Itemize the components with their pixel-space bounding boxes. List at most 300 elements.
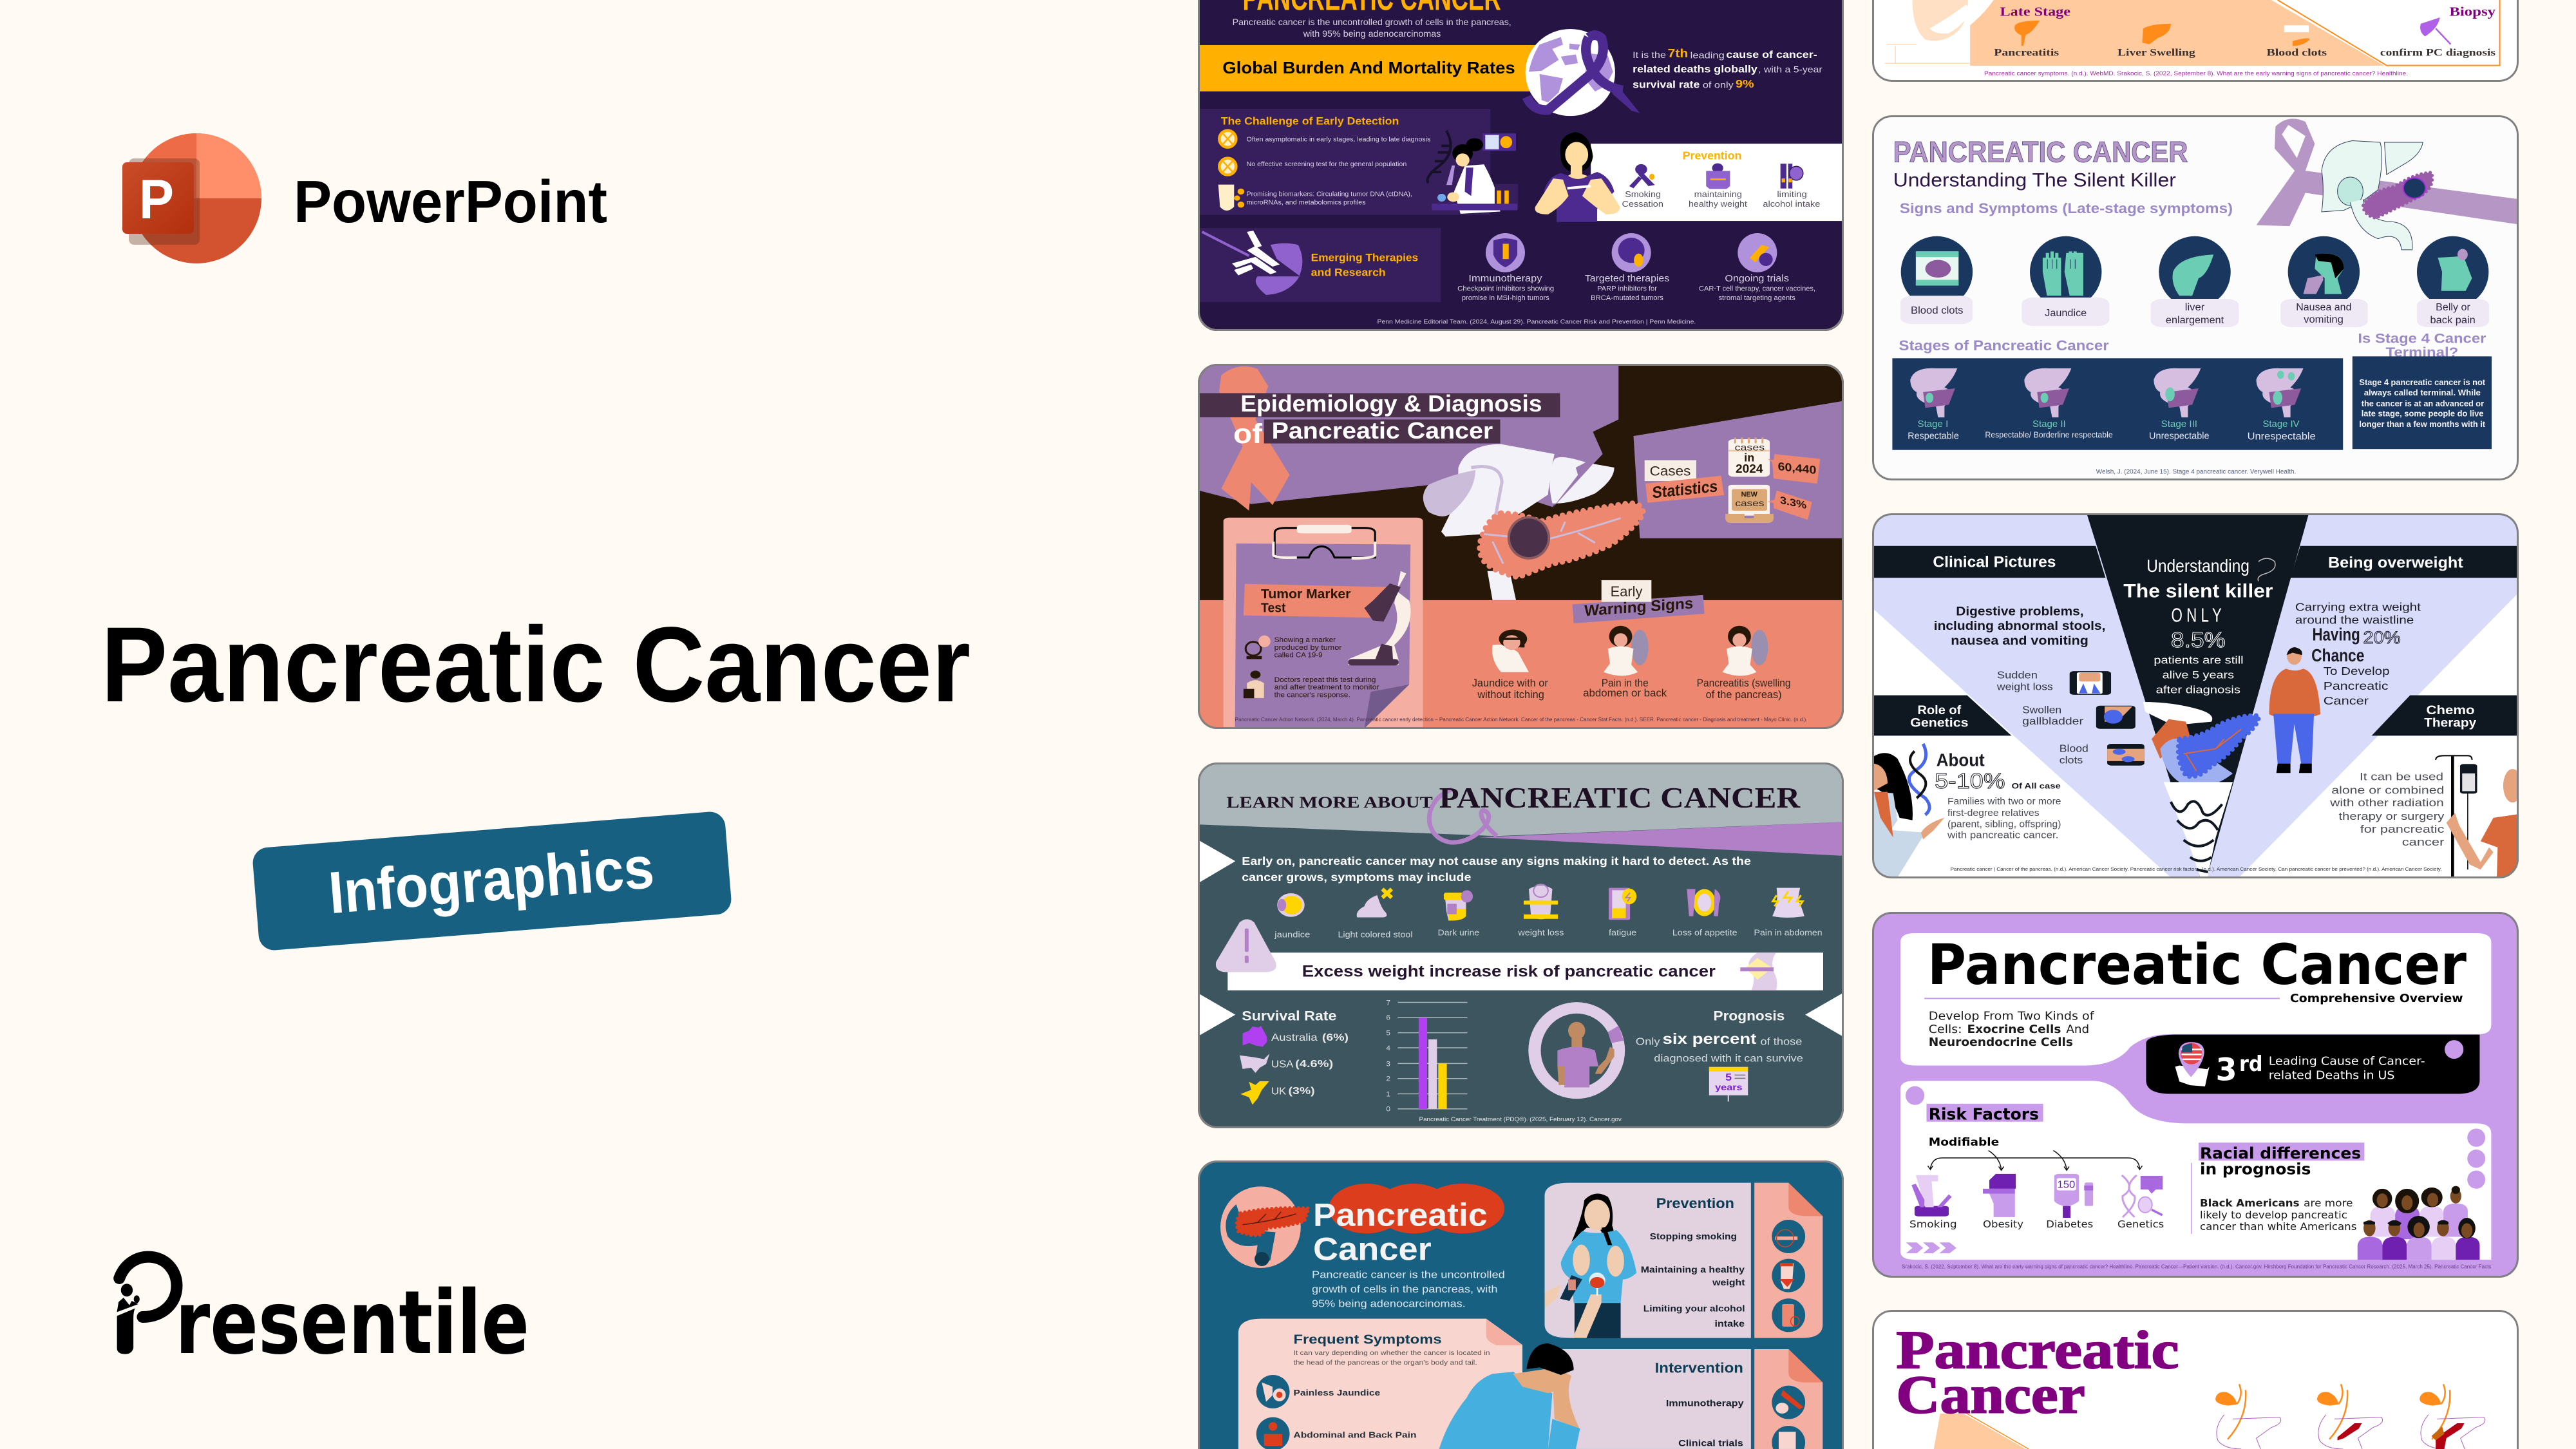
text block: late stage labels: Late Stage <box>2000 5 2070 19</box>
block: survival rate: (4.6%) <box>1295 1057 1333 1070</box>
block: cases statistics: Cases <box>1650 464 1690 479</box>
illustration: doctor with DNA <box>1874 744 1944 877</box>
text block: overweight chance <box>2295 601 2421 707</box>
block: risk factors: Obesity <box>1983 1219 2023 1230</box>
panel: frequent symptoms card: the head of the pancreas or the organ's body and tail. <box>1293 1359 1477 1367</box>
panel: frequent symptoms card: Abdominal and Back Pain <box>1293 1430 1417 1440</box>
heading: early warning signs: Early <box>1611 583 1643 600</box>
text block: definition: Pancreatic cancer is the uncontrolled growth of cells in the pancreas, <box>1233 18 1511 27</box>
panel: prevention: Cessation <box>1622 200 1663 209</box>
panel: intervention card: Clinical trials <box>1678 1438 1743 1448</box>
block: cases statistics: 60,440 <box>1778 460 1816 477</box>
panel: prevention: Prevention <box>1683 149 1741 162</box>
text block: late stage labels: Liver Swelling <box>2117 47 2195 59</box>
callout: 3rd leading cause: Leading Cause of Cancer- <box>2269 1054 2425 1068</box>
text block: genetics: About <box>1937 750 1985 770</box>
text block: center statistic: after diagnosis <box>2156 684 2240 696</box>
block: cases statistics: 2024 <box>1736 462 1763 475</box>
block: clinical signs with icons: Swollen <box>2022 704 2061 715</box>
panel: prevention: Smoking <box>1625 190 1661 199</box>
heading: signs and symptoms: Signs and Symptoms (Late-stage symptoms) <box>1900 200 2233 216</box>
panel: stages strip: Respectable <box>1908 430 1959 441</box>
text block: therapy labels: PARP inhibitors for <box>1597 285 1657 292</box>
panel: clipboard tumor marker test: Doctors repeat this test during <box>1274 676 1376 684</box>
text block: center statistic: Understanding <box>2146 556 2249 576</box>
block: cases statistics: NEW <box>1741 491 1757 498</box>
illustration: pancreas stage 3 <box>2420 1384 2485 1449</box>
block: prognosis: six percent <box>1663 1030 1757 1047</box>
panel: frequent symptoms card: It can vary depending on whether the cancer is located in <box>1293 1350 1490 1357</box>
illustration: abdominal pain patient <box>1604 626 1649 676</box>
banner: global burden: Global Burden And Mortality Rates <box>1222 58 1515 77</box>
callout: 3rd leading cause: related Deaths in US <box>2269 1068 2394 1082</box>
text block: 7th leading cause: leading <box>1690 51 1725 61</box>
source: Pancreatic Cancer Action Network. (2024, March 4). Pancreatic cancer early detection – Pancreatic Cancer Action Network. Cancer of the pancreas - Cancer Stat Facts. (n.d.). SEER. Pancreatic cancer - Diagnosis and treatment - Mayo Clinic. (n.d.). <box>1235 716 1807 723</box>
text block: chemo therapy: for pancreatic <box>2360 823 2444 835</box>
panel: stages strip: Stage I <box>1918 418 1948 429</box>
panel: intervention card <box>1544 1349 1823 1449</box>
text block: therapy labels <box>1457 273 1815 302</box>
panel: prevention card: intake <box>1714 1318 1745 1329</box>
panel: challenge of early detection: microRNAs, and metabolomics profiles <box>1247 199 1366 206</box>
logo: Presentile <box>117 1257 529 1374</box>
icon: ongoing trials <box>1738 233 1777 272</box>
text block: cell kinds: Exocrine Cells <box>1967 1023 2061 1036</box>
text block: therapy labels: Targeted therapies <box>1585 273 1669 283</box>
block: prognosis: of those <box>1760 1036 1802 1047</box>
heading: early warning signs <box>1573 580 1705 623</box>
badge: Infographics: Infographics <box>327 835 656 926</box>
text block: therapy labels: CAR-T cell therapy, cancer vaccines, <box>1699 285 1815 292</box>
text block: description: growth of cells in the pancreas, with <box>1312 1283 1498 1295</box>
text block: symptom labels: jaundice <box>1274 929 1310 939</box>
illustration: scientist at microscope <box>1427 131 1518 214</box>
text block: center statistic: O N L Y <box>2172 605 2222 627</box>
text block: overweight chance: Chance <box>2311 646 2364 665</box>
panel: emerging therapies <box>1198 228 1441 302</box>
icon: globe with ribbon <box>1526 29 1640 116</box>
title: of <box>1233 418 1263 449</box>
panel: stages strip <box>1892 358 2343 450</box>
panel: emerging therapies: Emerging Therapies <box>1311 251 1418 263</box>
text block: warning sign labels: abdomen or back <box>1583 687 1667 699</box>
text block: symptom labels: fatigue <box>1609 927 1636 937</box>
heading: is stage 4 terminal: Is Stage 4 Cancer <box>2358 331 2486 346</box>
panel: stage 4 explanation <box>2353 356 2492 449</box>
title: Understanding The Silent Killer <box>1893 170 2176 191</box>
text block: definition: with 95% being adenocarcinomas <box>1303 30 1441 39</box>
text block: warning sign labels: Jaundice with or <box>1472 677 1548 689</box>
source: Pancreatic Cancer Treatment (PDQ®). (2025, February 12). Cancer.gov. <box>1419 1116 1623 1122</box>
text block: genetics: (parent, sibling, offspring) <box>1947 819 2061 829</box>
text block: late stage labels <box>1994 5 2496 59</box>
text block: genetics <box>1935 750 2061 840</box>
title: Pancreatic <box>1896 1320 2179 1379</box>
block: clinical signs with icons: weight loss <box>1996 681 2053 692</box>
panel: comprehensive overview lilac <box>1872 912 2519 1278</box>
text block: warning sign labels: Pain in the <box>1602 677 1649 689</box>
panel: challenge of early detection: Often asymptomatic in early stages, leading to late diagnosis <box>1247 136 1430 143</box>
block: clinical signs with icons: Sudden <box>1997 669 2038 681</box>
icon: warning triangle <box>1216 919 1276 972</box>
text block: intro <box>1242 855 1751 884</box>
icon: ribbon <box>1219 366 1290 511</box>
heading cloud <box>1329 1184 1504 1233</box>
illustration: chemo patient with IV <box>2436 755 2522 878</box>
illustration: patient holding abdomen <box>1874 0 1994 66</box>
block: cases statistics: cases <box>1735 443 1765 453</box>
text block: center statistic: patients are still <box>2154 654 2244 667</box>
text block: intro: Early on, pancreatic cancer may not cause any signs making it hard to detect. As the <box>1242 855 1751 867</box>
title <box>1313 1197 1488 1267</box>
block: survival rate: (3%) <box>1289 1084 1315 1096</box>
title: Pancreatic Cancer <box>1272 417 1493 444</box>
panel: intervention card: Immunotherapy <box>1666 1398 1744 1408</box>
text block: therapy labels: promise in MSI-high tumors <box>1462 294 1549 302</box>
block: risk factors: Smoking <box>1909 1219 1957 1230</box>
panel: stages strip: Unrespectable <box>2149 430 2210 441</box>
block: cases statistics: cases <box>1735 498 1765 509</box>
panel: frequent symptoms card: Frequent Symptoms <box>1293 1332 1442 1347</box>
block: clinical signs with icons: clots <box>2060 754 2083 766</box>
panel: prevention: alcohol intake <box>1763 200 1820 209</box>
text block: symptom pills: Belly or <box>2436 301 2470 313</box>
text block: overweight chance: Pancreatic <box>2324 679 2389 692</box>
panel: clipboard tumor marker test: called CA 19-9 <box>1274 651 1323 659</box>
text block: intro: cancer grows, symptoms may include <box>1242 871 1471 884</box>
block: survival rate: Australia <box>1271 1031 1318 1043</box>
panel: prevention card <box>1544 1183 1823 1338</box>
panel: prevention: maintaining <box>1694 190 1742 199</box>
panel: stages strip: Stage II <box>2032 418 2066 429</box>
text block: genetics: 5-10% <box>1935 769 2005 793</box>
banner: global burden <box>1198 45 1536 91</box>
illustration: liver and pancreas with tumor <box>1423 444 1643 600</box>
text block: 7th leading cause: cause of cancer- <box>1726 49 1817 61</box>
panel: prevention card: Limiting your alcohol <box>1643 1303 1745 1314</box>
bar chart: survival rate: 3 <box>1386 1059 1390 1068</box>
text block: description: 95% being adenocarcinomas. <box>1312 1298 1466 1309</box>
panel: global burden (dark purple) <box>1198 0 1844 331</box>
panel: pancreatic cancer purple serif (cropped bottom) <box>1872 1310 2519 1449</box>
text block: chemo therapy: cancer <box>2402 836 2444 848</box>
panel: stage 4 explanation: the cancer is at an advanced or <box>2362 399 2484 408</box>
panel: stage 4 explanation: Stage 4 pancreatic cancer is not <box>2359 378 2485 387</box>
text block: symptom labels: Loss of appetite <box>1672 927 1738 937</box>
block: prognosis: diagnosed with it can survive <box>1654 1052 1803 1064</box>
panel: stage 4 explanation: always called terminal. While <box>2364 388 2481 398</box>
panel: prevention <box>1591 144 1842 221</box>
text block: description: Pancreatic cancer is the uncontrolled <box>1312 1269 1505 1280</box>
callout: excess weight: Excess weight increase risk of pancreatic cancer <box>1302 962 1716 980</box>
panel: pancreatic cancer teal <box>1198 1160 1844 1449</box>
panel: clipboard tumor marker test: and after treatment to monitor <box>1274 683 1379 691</box>
icon: targeted therapies <box>1612 233 1651 272</box>
text block: digestive problems: including abnormal stools, <box>1934 619 2105 632</box>
panel: challenge of early detection: No effective screening test for the general population <box>1247 161 1406 167</box>
text block: genetics: Of All case <box>2011 781 2061 791</box>
text block: therapy labels: Ongoing trials <box>1725 273 1789 283</box>
text block: digestive problems: nausea and vomiting <box>1951 633 2088 647</box>
text block: section headers: Being overweight <box>2328 554 2463 571</box>
panel: prevention card: weight <box>1712 1277 1745 1287</box>
title: Comprehensive Overview <box>2290 992 2463 1005</box>
source: Penn Medicine Editorial Team. (2024, August 29). Pancreatic Cancer Risk and Prevention | Penn Medicine. <box>1377 319 1696 325</box>
panel: stage 4 explanation: late stage, some people do live <box>2362 410 2483 419</box>
panel: stage 4 explanation: longer than a few months with it <box>2359 420 2485 429</box>
text block: 7th leading cause: survival rate <box>1633 79 1700 90</box>
arrows <box>1198 840 1842 1036</box>
panel: the silent killer lavender and black <box>1872 513 2522 880</box>
block: clinical signs with icons <box>1996 669 2145 766</box>
block: prognosis <box>1636 1009 1803 1101</box>
text block: symptom pills <box>1900 296 2489 327</box>
illustration: pancreas stage 1 <box>2215 1384 2281 1449</box>
text block: digestive problems: Digestive problems, <box>1956 604 2084 618</box>
panel: prevention: healthy weight <box>1689 200 1747 209</box>
panel: clipboard tumor marker test: Test <box>1261 601 1286 615</box>
panel: prevention card: Prevention <box>1656 1196 1734 1211</box>
block: racial differences: Racial differences <box>2200 1144 2361 1162</box>
text block: chemo therapy: with other radiation <box>2329 797 2444 809</box>
text block: genetics: first-degree relatives <box>1947 808 2040 818</box>
title: LEARN MORE ABOUT <box>1226 793 1433 811</box>
illustration: woman refusing wine <box>1544 1194 1636 1338</box>
bar chart: survival rate: 2 <box>1386 1075 1390 1083</box>
text block: late stage labels: Biopsy <box>2449 5 2496 19</box>
heading: is stage 4 terminal <box>2358 331 2486 360</box>
text block: digestive problems <box>1934 604 2105 647</box>
block: survival rate: (6%) <box>1322 1031 1349 1043</box>
block: clinical signs with icons: Blood <box>2060 742 2088 754</box>
text block: overweight chance: To Develop <box>2324 665 2390 677</box>
panel: learn more about pancreatic cancer <box>1198 762 1844 1128</box>
panel: understanding the silent killer <box>1872 115 2519 480</box>
text block: overweight chance: Cancer <box>2324 694 2369 707</box>
block: survival rate: Survival Rate <box>1242 1009 1336 1023</box>
panel: epidemiology and diagnosis <box>1198 364 1844 731</box>
text block: 7th leading cause: It is the <box>1633 50 1666 60</box>
text block: symptom pills: Nausea and <box>2296 301 2351 313</box>
text block: cell kinds: And <box>2066 1023 2089 1036</box>
text block: cell kinds <box>1929 1009 2094 1048</box>
text block: symptom pills: liver <box>2185 301 2204 313</box>
text block: overweight chance: Having <box>2312 625 2360 645</box>
bar chart: survival rate <box>1386 998 1467 1113</box>
heading: is stage 4 terminal: Terminal? <box>2386 345 2458 360</box>
bar chart: survival rate: 7 <box>1386 998 1390 1007</box>
title: Cancer <box>1896 1365 2085 1425</box>
text block: 7th leading cause: related deaths globally <box>1633 64 1757 75</box>
block: prognosis: years <box>1715 1083 1743 1092</box>
icon: immunotherapy <box>1486 233 1525 272</box>
block: cases statistics: 3.3% <box>1780 494 1806 511</box>
text block: symptom pills: enlargement <box>2166 314 2224 325</box>
panel: clipboard tumor marker test: Tumor Marker <box>1261 587 1350 601</box>
text block: therapy labels: Checkpoint inhibitors showing <box>1457 285 1554 292</box>
panel: challenge of early detection: Promising biomarkers: Circulating tumor DNA (ctDNA), <box>1247 191 1412 198</box>
panel: prevention card: Maintaining a healthy <box>1641 1264 1745 1274</box>
bar chart: survival rate: 5 <box>1386 1029 1390 1037</box>
logo: PowerPoint: PowerPoint <box>294 168 607 235</box>
callout: excess weight <box>1227 952 1823 990</box>
text block: symptom labels: weight loss <box>1518 927 1564 937</box>
logo: PowerPoint: P <box>139 169 174 231</box>
block: racial differences <box>2192 1142 2364 1234</box>
title <box>1198 390 1560 449</box>
block: survival rate <box>1240 1009 1349 1104</box>
text block: 7th leading cause: 7th <box>1668 47 1688 61</box>
bar chart: survival rate: 6 <box>1386 1014 1390 1022</box>
block: racial differences: are more <box>2304 1197 2353 1209</box>
text block: description <box>1312 1269 1505 1309</box>
text block: warning sign labels <box>1472 677 1791 701</box>
peach wedge <box>1934 1414 2025 1449</box>
panel: late stage and biopsy (cropped top) <box>1872 0 2519 82</box>
block: racial differences: likely to develop pancreatic <box>2200 1209 2347 1221</box>
text block: late stage labels: Blood clots <box>2266 47 2327 59</box>
text block: center statistic: The silent killer <box>2123 580 2273 601</box>
bar chart: survival rate: 0 <box>1386 1105 1390 1113</box>
text block: 7th leading cause: of only <box>1703 80 1734 90</box>
block: survival rate: UK <box>1271 1084 1286 1097</box>
text block: section headers <box>1910 554 2476 729</box>
heading: early warning signs: Warning Signs <box>1584 595 1693 620</box>
title: Epidemiology & Diagnosis <box>1240 390 1542 417</box>
illustration: woman breaking cigarette <box>1535 132 1620 222</box>
text block: symptom pills: back pain <box>2430 314 2476 325</box>
block: cases statistics <box>1645 437 1820 523</box>
text block: therapy labels: stromal targeting agents <box>1718 294 1795 302</box>
panel: clipboard tumor marker test: the cancer's response. <box>1274 691 1350 699</box>
text block: symptom pills: Blood clots <box>1911 305 1964 316</box>
text block: chemo therapy: It can be used <box>2360 771 2443 783</box>
panel: challenge of early detection <box>1198 109 1490 215</box>
bar chart: survival rate: 1 <box>1386 1090 1390 1098</box>
text block: 7th leading cause <box>1633 47 1823 90</box>
illustration: jaundice patient <box>1492 629 1529 672</box>
illustration: pancreatitis patient <box>1722 626 1768 676</box>
callout: 3rd leading cause <box>2146 1035 2479 1094</box>
text block: center statistic <box>2123 556 2275 696</box>
block: risk factors: Diabetes <box>2046 1219 2093 1230</box>
text block: symptom labels: Light colored stool <box>1338 929 1413 939</box>
icons: symptoms row <box>1277 884 1804 920</box>
text block: definition <box>1233 18 1511 39</box>
block: risk factors: Modifiable <box>1929 1135 1999 1148</box>
illustration: group of people <box>2358 1186 2479 1260</box>
text block: cell kinds: Cells: <box>1929 1023 1962 1036</box>
block: clinical signs with icons: gallbladder <box>2022 715 2083 727</box>
icon: ribbon <box>1429 789 1497 842</box>
text block: late stage labels: Pancreatitis <box>1994 47 2059 59</box>
icon: pancreas emblem <box>1220 1186 1309 1268</box>
panel: prevention: limiting <box>1777 190 1807 199</box>
text block: overweight chance: around the waistline <box>2295 614 2414 627</box>
block: cases statistics: Statistics <box>1653 477 1718 502</box>
block: risk factors: 150 <box>2057 1179 2075 1190</box>
block: racial differences: cancer than white Americans <box>2200 1221 2356 1233</box>
text block: chemo therapy <box>2329 771 2444 848</box>
logo: PowerPoint <box>122 133 607 263</box>
text block: cell kinds: Neuroendocrine Cells <box>1929 1036 2073 1048</box>
title: Pancreatic <box>1313 1197 1488 1233</box>
text block: therapy labels: BRCA-mutated tumors <box>1591 294 1663 302</box>
panel: clipboard tumor marker test: produced by tumor <box>1274 644 1341 652</box>
icons: symptom circles <box>1901 236 2488 308</box>
title: PANCREATIC CANCER <box>1439 782 1801 814</box>
illustration: man with headache <box>1439 1343 1580 1449</box>
decorative dots <box>1906 1086 2485 1189</box>
text block: section headers: Chemo <box>2427 703 2474 717</box>
block: cases statistics: in <box>1744 451 1754 464</box>
illustration: overweight man <box>2269 647 2320 773</box>
badge: Infographics <box>252 811 732 951</box>
block: risk factors: Genetics <box>2117 1219 2164 1230</box>
panel: clipboard tumor marker test <box>1224 518 1423 730</box>
text block: cell kinds: Develop From Two Kinds of <box>1929 1009 2094 1023</box>
text block: late stage labels: confirm PC diagnosis <box>2380 47 2496 59</box>
heading: stages: Stages of Pancreatic Cancer <box>1899 337 2109 354</box>
title: Cancer <box>1313 1231 1432 1267</box>
panel: stages strip: Unrespectable <box>2248 430 2316 442</box>
block: prognosis: 5 <box>1725 1072 1732 1083</box>
panel: challenge of early detection: The Challenge of Early Detection <box>1221 115 1399 127</box>
text block: overweight chance: Carrying extra weight <box>2295 601 2421 614</box>
panel: emerging therapies: and Research <box>1311 266 1386 278</box>
text block: section headers: Role of <box>1918 703 1962 717</box>
title: PANCREATIC CANCER <box>1893 136 2188 168</box>
block: survival rate: USA <box>1271 1058 1294 1070</box>
block: prognosis: Prognosis <box>1714 1009 1785 1023</box>
text block: chemo therapy: alone or combined <box>2331 784 2444 797</box>
text block: section headers: Therapy <box>2424 715 2476 729</box>
text block: 7th leading cause: , with a 5-year <box>1758 65 1823 75</box>
text block: overweight chance: 20% <box>2363 629 2401 647</box>
block: risk factors: Risk Factors <box>1929 1105 2039 1124</box>
text block: warning sign labels: without itching <box>1477 688 1544 701</box>
bar chart: survival rate: 4 <box>1386 1044 1390 1052</box>
title <box>1226 782 1801 814</box>
text block: warning sign labels: of the pancreas) <box>1706 688 1782 701</box>
icons: late-stage symptoms <box>2014 21 2309 46</box>
illustration: pancreas stage 2 <box>2317 1384 2383 1449</box>
text block: genetics: with pancreatic cancer. <box>1947 830 2058 840</box>
icon: biopsy <box>2420 17 2450 44</box>
text block: center statistic: alive 5 years <box>2163 669 2234 681</box>
text block: section headers: Genetics <box>1910 715 1968 729</box>
panel: stages strip: Respectable/ Borderline respectable <box>1985 431 2113 440</box>
text block: center statistic: 8.5% <box>2171 628 2226 652</box>
text block: genetics: Families with two or more <box>1947 796 2061 807</box>
text block: section headers: Clinical Pictures <box>1933 554 2056 571</box>
main title: Pancreatic Cancer <box>101 605 971 724</box>
text block: symptom labels: Dark urine <box>1438 927 1479 937</box>
logo: Presentile: resentile <box>175 1273 529 1374</box>
illustration: ribbon, liver and pancreas <box>2257 118 2519 250</box>
panel: clipboard tumor marker test: Showing a marker <box>1274 636 1336 644</box>
text block: symptom labels: Pain in abdomen <box>1754 927 1823 937</box>
title <box>1893 136 2188 191</box>
text block: chemo therapy: therapy or surgery <box>2339 810 2444 822</box>
block: prognosis: Only <box>1636 1036 1660 1047</box>
block: racial differences: Black Americans <box>2200 1197 2300 1209</box>
panel: frequent symptoms card: Painless Jaundice <box>1293 1388 1380 1397</box>
text block: symptom pills: Jaundice <box>2045 307 2087 318</box>
title <box>1896 1320 2179 1425</box>
panel: prevention card: Stopping smoking <box>1650 1231 1737 1242</box>
text block: therapy labels: Immunotherapy <box>1468 273 1542 283</box>
